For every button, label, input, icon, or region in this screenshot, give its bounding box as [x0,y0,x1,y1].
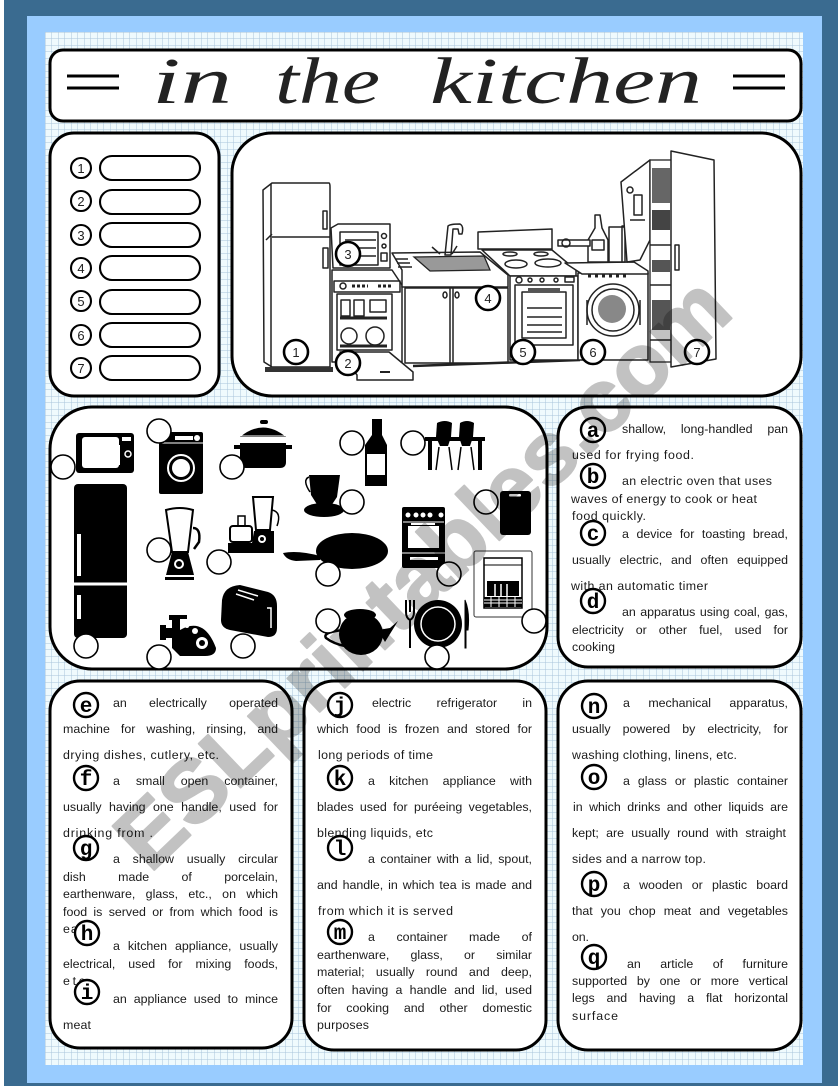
title banner [50,45,801,121]
icon: teapot [325,609,398,655]
icon: washing machine [159,432,203,494]
answer row 2: 2 [77,194,85,209]
definition b: waves of energy to cook or heat [570,492,758,506]
definition o: kept; are usually round with straight [572,826,786,840]
definition g: food is served or from which food is [63,905,278,919]
definition j: j [334,696,346,719]
number markers on illustration [284,242,709,375]
panel: kitchen illustration [232,133,801,396]
marker 1: 1 [292,345,300,360]
panel: definitions n to q [558,681,801,1050]
definition f: drinking from . [63,826,153,840]
marker 2 [336,351,360,375]
definition j: long periods of time [318,748,433,762]
definition h: h [81,924,93,947]
panel: definitions a to d [558,407,801,667]
icon: refrigerator [74,484,127,638]
title banner: the [275,45,380,118]
definition e: e [80,696,92,719]
marker 4 [476,286,500,310]
definition m: purposes [317,1018,369,1032]
definition n: washing clothing, linens, etc. [571,748,737,762]
definition p [572,872,788,944]
definition p: a wooden or plastic board [623,878,788,892]
illustration: bottle and boxes on counter [558,215,625,262]
definition c: with an automatic timer [570,579,708,593]
panel: appliance icons [50,407,547,669]
illustration: stove and oven [478,229,578,360]
answer row 6: 6 [77,328,85,343]
watermark: ESLprintables.com [95,257,749,888]
definition e: machine for washing, rinsing, and [63,722,278,736]
definition b [570,464,772,523]
icon: dishwasher [474,551,532,617]
definition b: food quickly. [572,509,646,523]
marker 5: 5 [519,345,527,360]
definition o [572,765,788,866]
definition f: usually having one handle, used for [63,800,278,814]
definition f: f [80,769,92,792]
definition l: a container with a lid, spout, [368,852,532,866]
marker 6: 6 [589,345,597,360]
answer row 4 [71,256,200,280]
definition g [63,836,278,936]
definition l: from which it is served [318,904,453,918]
definition p: on. [572,930,589,944]
definition i: i [81,983,93,1006]
panel: numbered answer list [50,133,219,396]
definition a: a [587,421,600,444]
definition o: in which drinks and other liquids are [573,800,788,814]
definition e: drying dishes, cutlery, etc. [63,748,219,762]
marker 3 [336,242,360,266]
icon: blender [165,508,199,580]
definition i: meat [63,1018,92,1032]
definition q: surface [572,1009,618,1023]
icon: stove [402,507,445,568]
panel: definitions e to i [50,681,292,1048]
definition l [317,836,532,918]
answer row 5: 5 [77,294,85,309]
definition e [63,693,278,762]
definition m [317,920,532,1032]
blank answer circles [51,419,546,669]
answer row 5 [71,290,200,314]
definition o: o [588,768,600,791]
illustration: refrigerator [263,183,333,372]
definition h: electrical, used for mixing foods, [63,957,278,971]
illustration: sink counter and cabinets [392,224,580,366]
marker 1 [284,340,308,364]
answer row 3 [71,223,200,247]
title banner: kitchen [430,45,702,118]
icon: wine bottle [365,419,387,486]
definition d: d [587,592,599,615]
definition o: sides and a narrow top. [572,852,706,866]
definition h: a kitchen appliance, usually [113,939,278,953]
definition d [572,589,788,654]
definition p: p [588,875,600,898]
marker 3: 3 [344,247,352,262]
definition q: supported by one or more vertical [572,974,788,988]
definition h [63,921,278,988]
definition j: electric refrigerator in [372,696,532,710]
marker 5 [511,340,535,364]
definition p: that you chop meat and vegetables [572,904,788,918]
definition n: n [588,697,600,720]
definition q: legs and having a flat horizontal [572,991,788,1005]
definition q: an article of furniture [627,957,788,971]
definition k: a kitchen appliance with [368,774,532,788]
definition k: blending liquids, etc [317,826,433,840]
definition b: an electric oven that uses [622,474,772,488]
definition q [572,945,788,1023]
definition g: earthenware, glass, etc., on which [63,887,278,901]
answer row 1: 1 [77,161,85,176]
marker 7 [685,340,709,364]
icon: meat grinder [160,615,216,656]
icon: cooking pot [234,420,292,468]
answer row 6 [71,323,200,347]
illustration: washing machine [565,262,648,360]
definition k: blades used for puréeing vegetables, [317,800,532,814]
definition m: a container made of [368,930,532,944]
icon: cup and saucer [304,475,344,517]
marker 7: 7 [693,345,701,360]
answer row 7: 7 [77,361,85,376]
definition m: m [334,923,346,946]
definition q: q [588,948,600,971]
definition k [317,766,532,840]
icon: microwave [76,433,134,473]
definition g: a shallow usually circular [113,852,278,866]
icon: frying pan [283,533,388,569]
definition g: g [80,839,92,862]
definition c: usually electric, and often equipped [572,553,788,567]
icon: cutting board [500,491,531,535]
title banner: in [152,45,232,118]
definition i: an appliance used to mince [113,992,278,1006]
definition f: a small open container, [113,774,278,788]
answer row 3: 3 [77,228,85,243]
definition h: etc [63,974,85,988]
marker 4: 4 [484,291,492,306]
definition c [570,521,788,593]
marker 6 [581,340,605,364]
definition e: an electrically operated [113,696,278,710]
icon: place setting [406,600,469,648]
illustration: dishwasher [332,270,413,380]
definition g: eaten [63,922,98,936]
definition a: used for frying food. [572,448,694,462]
answer row 4: 4 [77,261,85,276]
definition m: often having a handle and lid, used [317,983,532,997]
definition a [572,418,788,462]
definition c: c [587,524,599,547]
definition n [571,694,788,762]
definition m: earthenware, glass, or similar [317,948,532,962]
answer row 2 [71,190,200,214]
marker 2: 2 [344,356,352,371]
icon: dining table and chairs [425,421,485,470]
definition m: for cooking and other domestic [317,1001,532,1015]
definition m: material; usually round and deep, [317,965,532,979]
definition j: which food is frozen and stored for [317,722,532,736]
definition l: l [334,839,346,862]
definition f [63,766,278,840]
panel: definitions j to m [304,681,546,1050]
definition i [63,980,278,1032]
definition k: k [334,769,346,792]
definition n: a mechanical apparatus, [623,696,788,710]
icon: toaster [221,585,277,637]
icon: food processor [228,497,279,553]
definition g: dish made of porcelain, [63,870,278,884]
definition d: cooking [572,640,615,654]
definition b: b [587,467,599,490]
definition d: an apparatus using coal, gas, [622,605,788,619]
illustration: microwave [331,224,390,268]
illustration: open fridge-freezer [621,151,716,367]
definition l: and handle, in which tea is made and [317,878,532,892]
definition c: a device for toasting bread, [622,527,788,541]
definition d: electricity or other fuel, used for [572,623,788,637]
definition o: a glass or plastic container [623,774,788,788]
definition n: usually powered by electricity, for [572,722,788,736]
definition j [317,693,532,762]
answer row 7 [71,356,200,380]
definition a: shallow, long-handled pan [622,422,788,436]
answer row 1 [71,156,200,180]
